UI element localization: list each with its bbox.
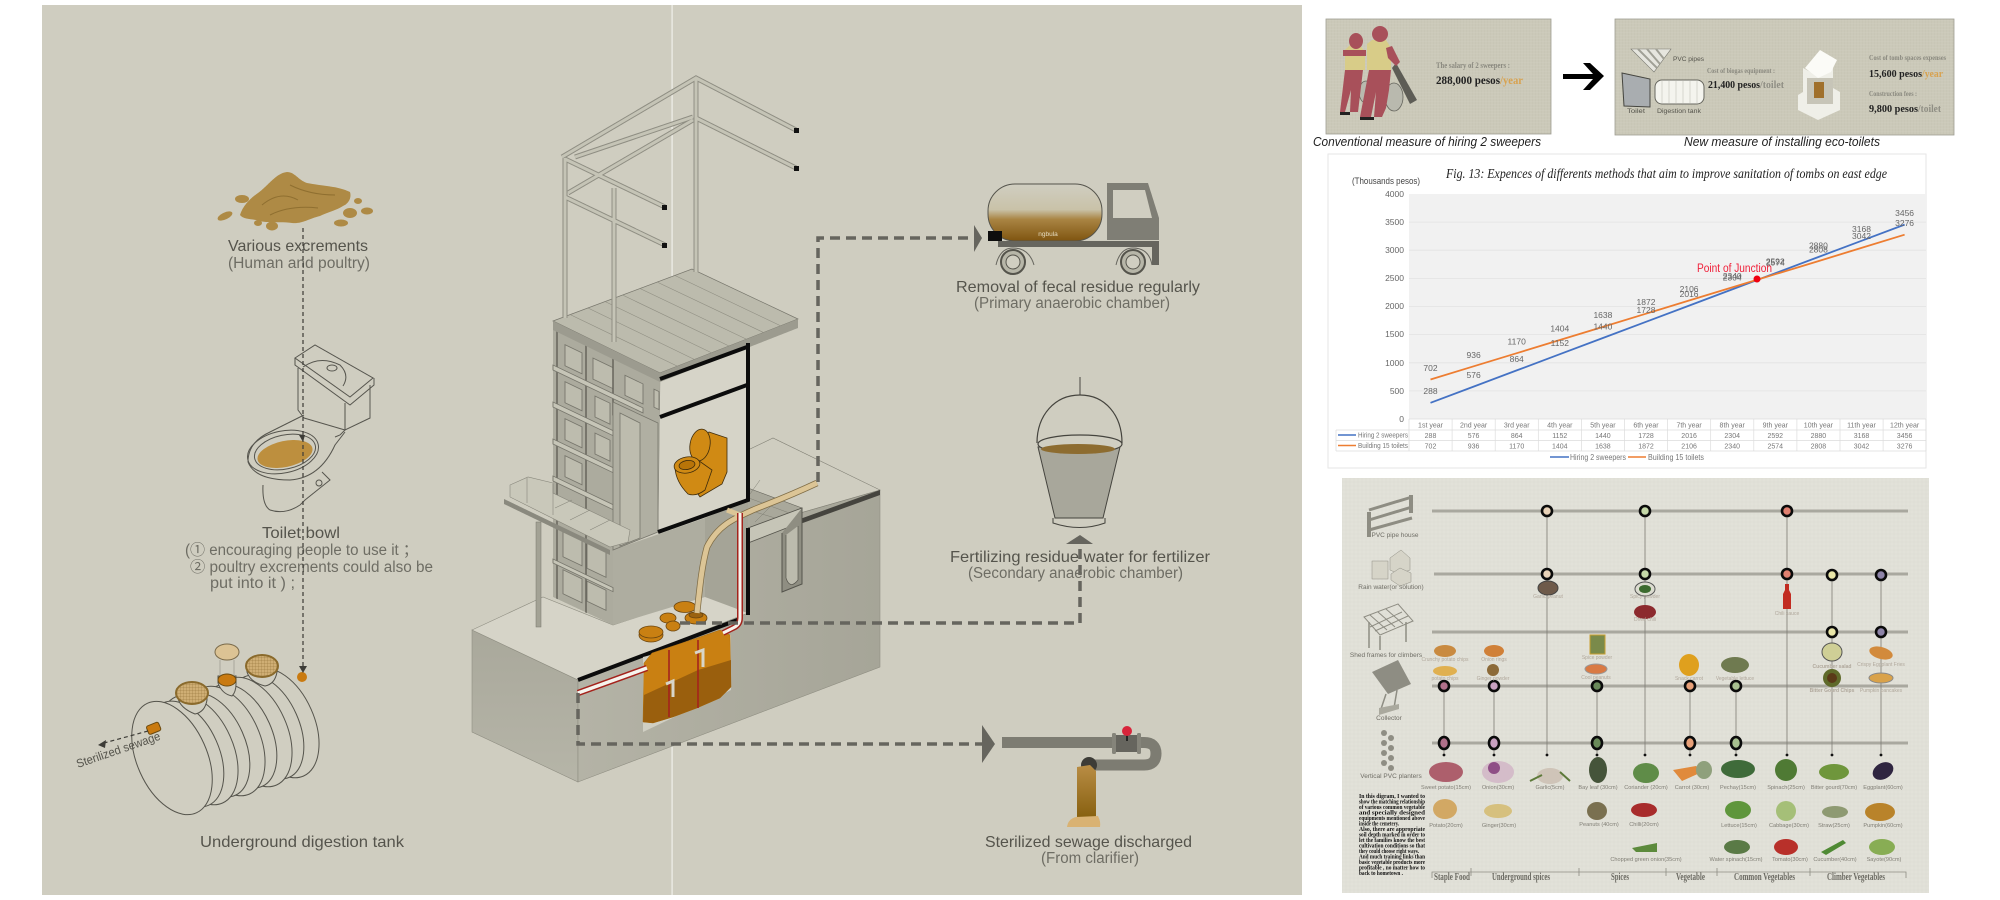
callout: point of junction [1697,263,1772,282]
icon: PVC pipes: PVC pipes [1673,56,1705,63]
category bracket and headings [1432,868,1906,883]
grate and U channel on base [727,480,802,592]
data table: 2574 [1768,444,1783,450]
data table: 11th year [1847,422,1876,430]
label: various excrements: Various excrements [228,238,368,255]
steel roof frame [562,78,799,342]
text: tomb space and construction costs: /year [1921,68,1943,80]
foods above fourth bar: Vegetable lettuce [1716,676,1754,682]
icon: rain water boxes: Rain water(or solution) [1358,584,1424,591]
data table [1336,419,1926,451]
text: salary of 2 sweepers: /year [1499,75,1523,87]
icon: digestion tank: Digestion tank [1657,108,1702,115]
paragraph: digest note: back to hometown . [1359,871,1403,877]
data table: 3456 [1897,433,1912,440]
data table: 4th year [1547,422,1573,430]
data labels: 936 [1467,350,1481,360]
data table: 1404 [1552,444,1568,450]
text: salary of 2 sweepers [1436,61,1523,87]
matrix nodes [1439,506,1886,749]
text: biogas equipment cost [1707,67,1784,91]
label: sterilized sewage discharged: Sterilized sewage discharged [985,834,1192,851]
data labels: 3042 [1852,231,1871,241]
data table: 1728 [1638,433,1654,440]
data labels: 864 [1510,354,1524,364]
vegetable row 1: Garlic(5cm) [1536,785,1565,791]
vegetable row 2: Straw(25cm) [1818,823,1850,829]
paragraph: digest note: cultivation conditions so that [1359,844,1425,850]
text: tomb space and construction costs: 15,600 pesos [1869,68,1923,80]
paragraph: digest note: soil depth marked in order to [1359,832,1425,838]
data labels: 2304 [1723,272,1742,282]
data table: 1170 [1509,444,1524,450]
data labels: 1404 [1550,324,1570,334]
upper room interior [658,345,747,532]
arrow: thin dashed line from excrement to tank [299,228,307,673]
data table: 2016 [1681,433,1697,440]
vegetable row 2: Cabbage(30cm) [1769,823,1809,829]
vertical connector lines [1444,511,1881,755]
vegetable row 1: Carrot (30cm) [1675,785,1709,791]
vegetable row 3: Cucumber(40cm) [1813,857,1857,863]
icon: shed frame: Shed frames for climbers [1350,652,1423,659]
icon: collector: Collector [1376,715,1403,722]
data labels: 2106 [1680,284,1699,294]
data table: Hiring 2 sweepers [1358,432,1408,440]
horizontal equipment bars [1432,510,1908,744]
icon: bucket of fertilizer [1037,377,1122,528]
paragraph: digest note: basic vegetable products more [1359,860,1425,866]
label: toilet bowl notes: (① encouraging people to use it ； [185,541,418,559]
vegetable row 2: Lettuce(15cm) [1721,823,1757,829]
arrow: dashed line to sewage pipe [578,693,995,763]
paragraph: digest note: let the families know the best [1359,838,1425,844]
data labels: 702 [1423,363,1438,373]
foods above fourth bar: Crispy Eggplant Fries [1857,662,1905,668]
black cut lines [578,343,748,680]
drawing: isometric eco-toilet section [472,78,880,782]
y axis labels: 3500 [1385,217,1404,227]
y axis labels: 4000 [1385,189,1404,199]
base block walls [472,438,880,782]
icon: discharge pipe with valve [1002,726,1156,827]
data table: 1152 [1552,433,1567,440]
vegetable row 1: Sweet potato(15cm) [1421,785,1471,791]
connector end dots [1443,754,1882,756]
arrow: dashed line to bucket [680,535,1093,623]
icon: septic truck [988,183,1159,274]
data table: 2304 [1724,433,1740,440]
text: tomb space and construction costs: Cost of tomb spaces expenses [1869,54,1946,62]
icon: PVC pipes [1631,49,1705,72]
data labels: 1440 [1593,322,1613,332]
label: sterilized sewage discharged: (From clarifier) [1041,850,1139,867]
vegetable row 2: Ginger(30cm) [1482,823,1516,829]
vegetable row 3 [1610,839,1902,863]
vegetable row 1 [1421,757,1903,791]
arrow: dashed line to truck [818,225,982,482]
panel: new measure [1615,19,1954,135]
series: building 15 toilets [1430,235,1905,380]
label: removal of fecal residue: (Primary anaerobic chamber) [974,295,1170,312]
foods above fourth bar: Spice powder [1582,655,1612,661]
data table: 3168 [1854,433,1869,440]
data table: 6th year [1633,422,1659,430]
label: various excrements: (Human and poultry) [228,255,370,272]
foods on second bar: Chili sauce [1775,611,1799,617]
label: toilet bowl notes: put into it ) ; [210,575,295,592]
data labels: 2574 [1766,258,1785,268]
panel: conventional measure [1326,19,1551,134]
label: fertilizing residue water: (Secondary anaerobic chamber) [968,565,1183,582]
foods above fourth bar: Cool peanuts [1581,675,1611,681]
icon: white tomb tower [1798,50,1840,120]
data table: 9th year [1763,422,1789,430]
chart title: Fig. 13: Expences of differents methods that aim to improve sanitation of tombs on east edge [1445,167,1887,182]
data labels: 1728 [1637,305,1656,315]
y axis labels: 1500 [1385,329,1404,339]
paragraph: digest note: and specially designed [1359,810,1426,816]
paragraph: digest note: In this digram, I wanted to [1359,794,1425,800]
icon: pile of excrement [216,172,373,230]
panel: line chart of expenses [1328,154,1926,468]
data table: Building 15 toilets [1358,443,1408,450]
paragraph: digest note [1359,794,1426,877]
vegetable row 2: Potato(20cm) [1429,823,1463,829]
label: toilet bowl notes: Toilet bowl [262,525,340,542]
foods on second bar [1533,581,1799,623]
label: fertilizing residue water [950,549,1211,582]
digestion tank section [643,630,731,732]
vegetable row 2: Peanuts (40cm) [1579,822,1619,828]
paragraph: digest note: equipments mentioned above [1359,816,1425,822]
vegetable row 1: Bay leaf (30cm) [1578,785,1618,791]
label: toilet bowl notes [185,525,433,592]
category bracket and headings: Vegetable [1676,872,1705,883]
category bracket and headings: Common Vegetables [1734,872,1795,883]
label: underground digestion tank: Underground digestion tank [200,834,405,851]
icon: two sweepers [1340,26,1417,120]
foods above fourth bar: potato chips [1432,676,1459,682]
vegetable row 3: Sayote(90cm) [1867,857,1902,863]
data table: 3276 [1897,444,1912,450]
foods above fourth bar: Onion rings [1481,657,1507,663]
captions under cost panels: New measure of installing eco-toilets [1684,134,1880,149]
y axis labels: 500 [1390,386,1404,396]
text: tomb space and construction costs [1869,54,1946,115]
data labels: 3168 [1852,224,1871,234]
icon: septic truck: ngbula [1038,231,1058,238]
data table: 3rd year [1504,422,1530,430]
foods above fourth bar: Cucumber salad [1813,664,1851,670]
icon: rain water boxes [1358,550,1424,591]
chart legend [1550,453,1704,462]
icon: vertical PVC planters [1360,730,1422,780]
paragraph: digest note: Also, there are appropriate [1359,827,1425,833]
y axis labels: 2500 [1385,273,1404,283]
category bracket and headings: Spices [1611,872,1629,883]
ground floor interior walls [613,500,748,625]
paragraph: digest note: inside the cemetery. [1359,822,1399,828]
text: tomb space and construction costs: Construction fees : [1869,90,1917,98]
vegetable row 3: Tomato(30cm) [1772,857,1808,863]
series: hiring 2 sweepers [1430,225,1905,403]
data labels: 3456 [1895,208,1914,218]
data table: 12th year [1890,422,1920,430]
data labels: 288 [1423,386,1438,396]
data labels: 1872 [1637,297,1656,307]
icon: PVC pipe house: PVC pipe house [1372,532,1419,539]
axis unit label: (Thousands pesos) [1352,176,1420,187]
data table: 576 [1468,433,1480,440]
data table: 2808 [1811,444,1826,450]
icon: PVC pipe house [1369,495,1419,539]
data table: 2592 [1768,433,1783,440]
data labels: 2016 [1680,289,1699,299]
chart legend: Building 15 toilets [1648,453,1704,462]
paragraph: digest note: show the matching relationship [1359,800,1426,806]
lids on floor [639,602,707,642]
foods above fourth bar: Pumpkin pancakes [1860,688,1903,694]
foods on second bar: Garlic peanut [1533,594,1563,600]
y axis labels [1385,189,1404,424]
panel: planting matrix [1342,478,1929,893]
icon: shed frame [1350,604,1423,659]
category bracket and headings: Staple Food [1434,872,1470,883]
text: biogas equipment cost: Cost of biogas equipment : [1707,67,1775,75]
plot area [1409,194,1926,419]
label: toilet bowl notes: ② poultry excrements could also be [190,558,433,576]
red and white outlet pipes [578,513,740,693]
vegetable row 1: Eggplant(60cm) [1863,785,1903,791]
data labels: 2592 [1766,256,1785,266]
data table: 3042 [1854,444,1869,450]
data labels: 2880 [1809,240,1828,250]
icon: underground digestion tank [116,644,335,827]
data labels: 2340 [1723,271,1742,281]
paragraph: digest note: And much training links than [1359,854,1426,860]
arrow: black transition arrow [1563,63,1604,90]
data labels: 576 [1467,370,1481,380]
label: removal of fecal residue [956,279,1200,312]
data table: 936 [1468,444,1480,450]
data table: 2880 [1811,433,1826,440]
captions under cost panels [1313,134,1880,149]
data table: 10th year [1804,422,1834,430]
shelf with blocks [504,477,630,627]
text: tomb space and construction costs: /toilet [1917,103,1941,115]
data table: 288 [1425,433,1436,440]
data table: 1st year [1418,422,1444,430]
data table: 2106 [1681,444,1697,450]
foods above fourth bar [1422,635,1905,694]
text: tomb space and construction costs: 9,800 pesos [1869,103,1919,115]
paragraph: digest note: they could choose right ways. [1359,849,1419,855]
captions under cost panels: Conventional measure of hiring 2 sweepers [1313,134,1541,149]
data table: 702 [1425,444,1436,450]
paragraph: digest note: profitable , no matter how to [1359,866,1425,872]
vegetable row 3: Chopped green onion(35cm) [1610,857,1682,863]
data table: 2nd year [1460,422,1488,430]
beige inlet hose [697,483,817,613]
data table: 8th year [1720,422,1746,430]
vegetable row 1: Bitter gourd(70cm) [1811,785,1857,791]
foods above fourth bar: Snack carrot [1675,676,1704,682]
data labels: 2808 [1809,244,1828,254]
label: fertilizing residue water: Fertilizing residue water for fertilizer [950,549,1211,566]
text: salary of 2 sweepers: 288,000 pesos [1436,75,1501,87]
panel: biogas system diagram background [42,5,1302,895]
callout: point of junction: Point of Junction [1697,263,1772,275]
data labels [1423,208,1914,396]
y axis labels: 1000 [1385,358,1404,368]
icon: digestion tank [1655,80,1704,115]
label: sterilized sewage discharged [985,834,1192,867]
deck [553,269,798,382]
data table: 1872 [1638,444,1654,450]
data table: 864 [1511,433,1523,440]
vegetable row 1: Onion(30cm) [1482,785,1514,791]
vegetable row 2 [1429,799,1903,829]
orange toilet [673,428,727,497]
label: removal of fecal residue: Removal of fecal residue regularly [956,279,1200,296]
vegetable row 1: Coriander (20cm) [1624,785,1668,791]
foods above fourth bar: Ginger powder [1477,676,1510,682]
data table: 1638 [1595,444,1611,450]
text: salary of 2 sweepers: The salary of 2 sweepers : [1436,61,1510,70]
facade with panels [553,327,660,648]
text: biogas equipment cost: 21,400 pesos [1708,79,1761,91]
icon: toilet bowl line drawing [243,345,374,512]
data labels: 1170 [1508,336,1526,346]
data labels: 1152 [1551,338,1569,348]
paragraph: digest note: of various common vegetable [1359,805,1425,811]
y axis labels: 0 [1399,414,1404,424]
data table: 7th year [1676,422,1702,430]
label: various excrements [228,238,370,272]
arrow: sterilized sewage out of tank: Sterilized sewage [74,729,162,771]
data labels: 3276 [1895,218,1914,228]
category bracket and headings: Underground spices [1492,872,1550,883]
foods on second bar: Dried chili [1634,617,1656,623]
data table: 2340 [1724,444,1740,450]
icon: collector [1372,660,1411,722]
data table: 5th year [1590,422,1616,430]
vegetable row 2: Pumpkin(60cm) [1863,823,1903,829]
icon: vertical PVC planters: Vertical PVC planters [1360,773,1422,780]
y axis labels: 3000 [1385,245,1404,255]
icon: toilet cubicle: Toilet [1627,108,1645,115]
vegetable row 2: Chilli(20cm) [1629,822,1659,828]
foods above fourth bar: Bitter Gourd Chips [1810,688,1855,694]
vegetable row 1: Pechay(15cm) [1720,785,1756,791]
chart legend: Hiring 2 sweepers [1570,453,1626,462]
category bracket and headings: Climber Vegetables [1827,872,1885,883]
y axis labels: 2000 [1385,301,1404,311]
foods above fourth bar: Crunchy potato chips [1422,657,1469,663]
data table: 1440 [1595,433,1611,440]
vegetable row 1: Spinach(25cm) [1767,785,1805,791]
icon: toilet cubicle [1622,73,1650,115]
text: biogas equipment cost: /toilet [1759,79,1784,91]
foods on second bar: Spicy powder [1630,594,1660,600]
data labels: 1638 [1593,310,1613,320]
vegetable row 3: Water spinach(15cm) [1710,857,1763,863]
